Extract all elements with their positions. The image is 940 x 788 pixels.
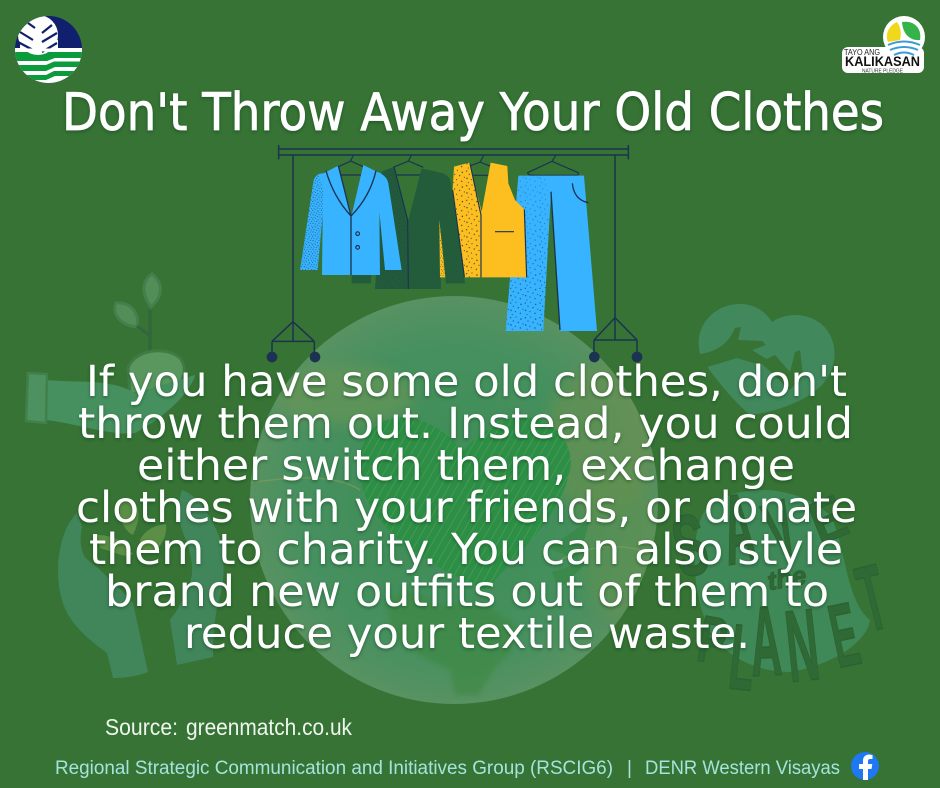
globe illustration [250,296,660,704]
hatched heart [359,417,571,590]
lettering: save the planet: E [821,583,867,687]
rack frame [272,145,637,353]
lettering: save the planet: N [780,587,824,704]
source text: greenmatch.co.uk [186,714,352,740]
lettering: save the planet: A [747,586,784,698]
icon: Tayo ang Kalikasan logo: KALIKASAN [845,54,920,69]
icon: Tayo ang Kalikasan logo: NATURE PLEDGE [862,68,904,74]
body text: clothes with your friends, or donate [76,483,857,533]
yellow vest [453,163,527,277]
icon: DENR logo [14,15,84,84]
body text: throw them out. Instead, you could [78,399,853,449]
icon: heart with hands [699,304,835,415]
footer credit: DENR Western Visayas [645,758,840,779]
source text: Source: [105,714,178,740]
body text: either switch them, exchange [137,441,795,491]
lettering: save the planet: E [800,482,856,557]
source text [105,714,352,740]
body text: reduce your textile waste. [184,609,750,659]
rack wheels [267,352,642,362]
footer credit: Regional Strategic Communication and Initiatives Group (RSCIG6) [55,758,613,779]
body text: brand new outfits out of them to [105,567,829,617]
dark jacket [352,167,465,289]
illustration: clothes rack [267,145,642,362]
lettering: save the planet: V [753,482,807,577]
blue trousers [506,176,597,331]
hangers [338,155,579,175]
icon: cupped hands with leaves [58,490,224,678]
lettering: save the planet [664,473,897,711]
icon: Tayo ang Kalikasan logo [842,16,925,74]
body text: If you have some old clothes, don't [86,357,847,407]
icon: hand holding sprout [26,274,195,433]
icon: Tayo ang Kalikasan logo: TAYO ANG [844,47,880,57]
lettering: save the planet: P [693,601,733,679]
lettering: save the planet: S [664,494,716,596]
body text [76,357,857,659]
blue blazer [300,165,402,275]
footer credit: | [627,758,632,779]
icon: facebook [851,752,879,780]
lettering: save the planet: the [765,560,809,596]
body text: them to charity. You can also style [89,525,843,575]
lettering: save the planet: T [848,545,897,652]
lettering: save the planet: L [725,605,760,711]
lettering: save the planet: A [716,473,762,587]
